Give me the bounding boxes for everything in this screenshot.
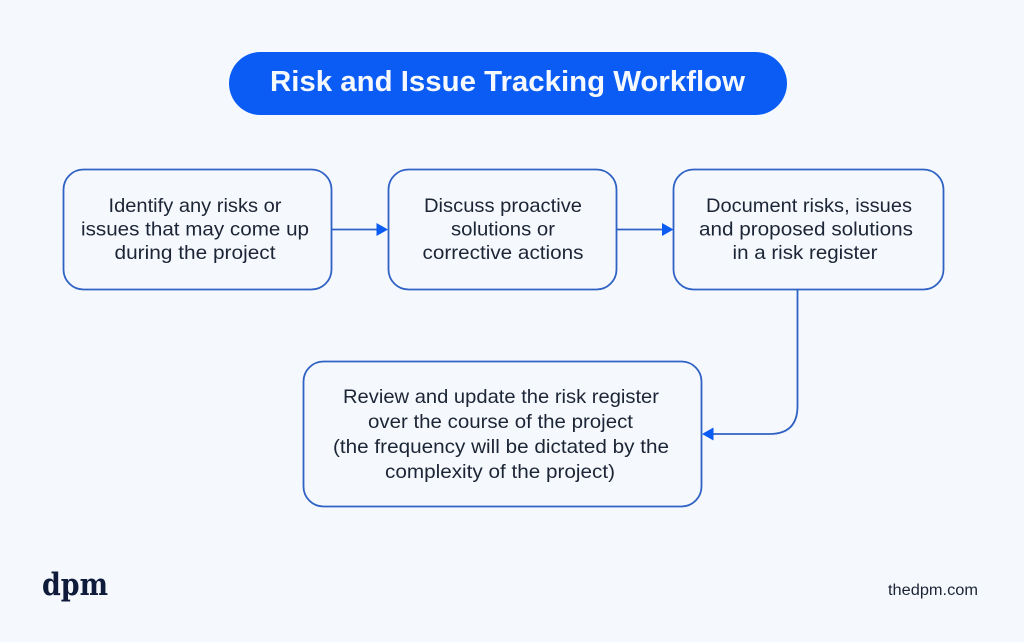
panel: document risks: in a risk register xyxy=(732,242,878,264)
panel: identify risks: issues that may come up xyxy=(81,218,309,240)
panel: discuss solutions: Discuss proactive xyxy=(424,195,582,217)
panel: identify risks xyxy=(64,170,332,290)
arrow: identify to discuss xyxy=(332,223,388,236)
website url: thedpm.com xyxy=(888,582,978,599)
panel: review and update: over the course of the project xyxy=(368,411,634,433)
panel: document risks: Document risks, issues xyxy=(706,195,912,217)
panel: document risks xyxy=(674,170,944,290)
arrow: document to review xyxy=(702,290,798,440)
panel: review and update: Review and update the risk register xyxy=(343,386,660,408)
panel: document risks: and proposed solutions xyxy=(699,218,913,240)
panel: review and update: complexity of the project) xyxy=(385,461,615,483)
logo: dpm: dpm xyxy=(42,567,108,603)
panel: review and update: (the frequency will be dictated by the xyxy=(333,436,669,458)
title: Risk and Issue Tracking Workflow xyxy=(270,66,745,98)
title xyxy=(229,52,787,115)
arrow: discuss to document xyxy=(617,223,674,236)
panel: discuss solutions xyxy=(388,170,616,290)
panel: identify risks: Identify any risks or xyxy=(108,195,282,217)
panel: discuss solutions: solutions or xyxy=(451,218,556,240)
panel: identify risks: during the project xyxy=(114,242,276,264)
panel: review and update xyxy=(304,362,702,506)
panel: discuss solutions: corrective actions xyxy=(422,242,584,264)
